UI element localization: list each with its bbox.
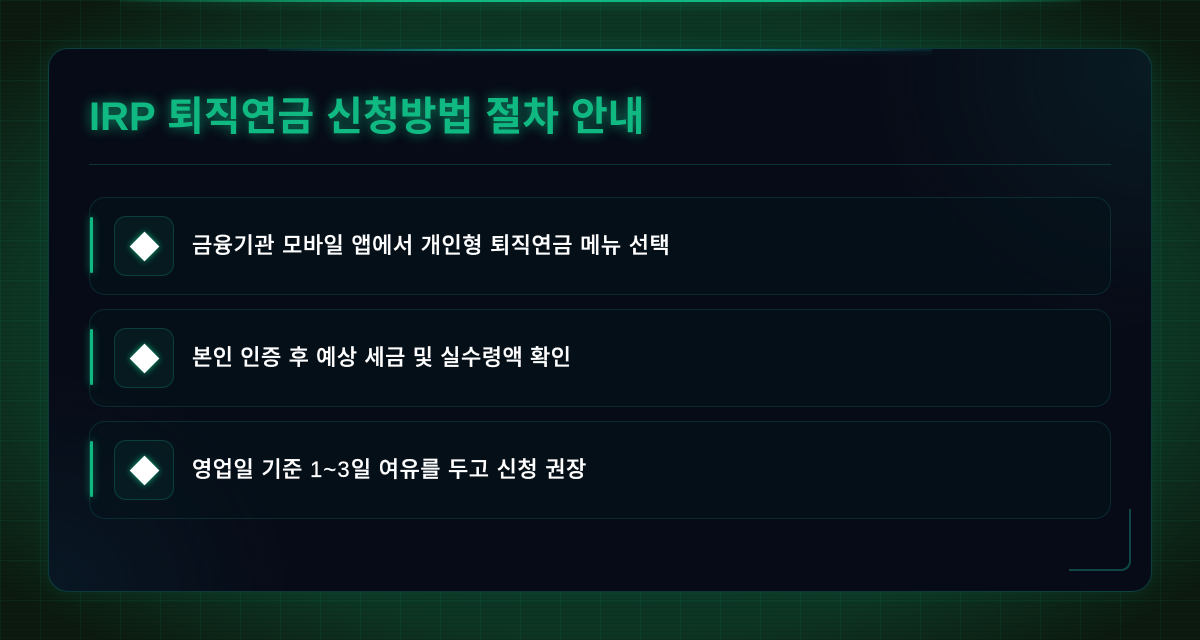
step 1 text: 금융기관 모바일 앱에서 개인형 퇴직연금 메뉴 선택 — [192, 233, 670, 258]
step 1 icon: diamond — [114, 216, 174, 276]
step 3 icon: diamond — [114, 440, 174, 500]
step 3 text: 영업일 기준 1~3일 여유를 두고 신청 권장 — [192, 457, 587, 482]
step 2 accent bar — [90, 329, 93, 385]
step 2 — [89, 309, 1111, 407]
step 3 — [89, 421, 1111, 519]
card top accent line — [268, 49, 932, 51]
step 2 icon: diamond — [114, 328, 174, 388]
title: IRP 퇴직연금 신청방법 절차 안내 — [89, 95, 645, 139]
panel: main card — [48, 48, 1152, 592]
step 1 — [89, 197, 1111, 295]
top glow bar — [120, 0, 1080, 2]
corner bracket — [1069, 509, 1131, 571]
step 1 accent bar — [90, 217, 93, 273]
step 2 text: 본인 인증 후 예상 세금 및 실수령액 확인 — [192, 345, 572, 370]
step 3 accent bar — [90, 441, 93, 497]
